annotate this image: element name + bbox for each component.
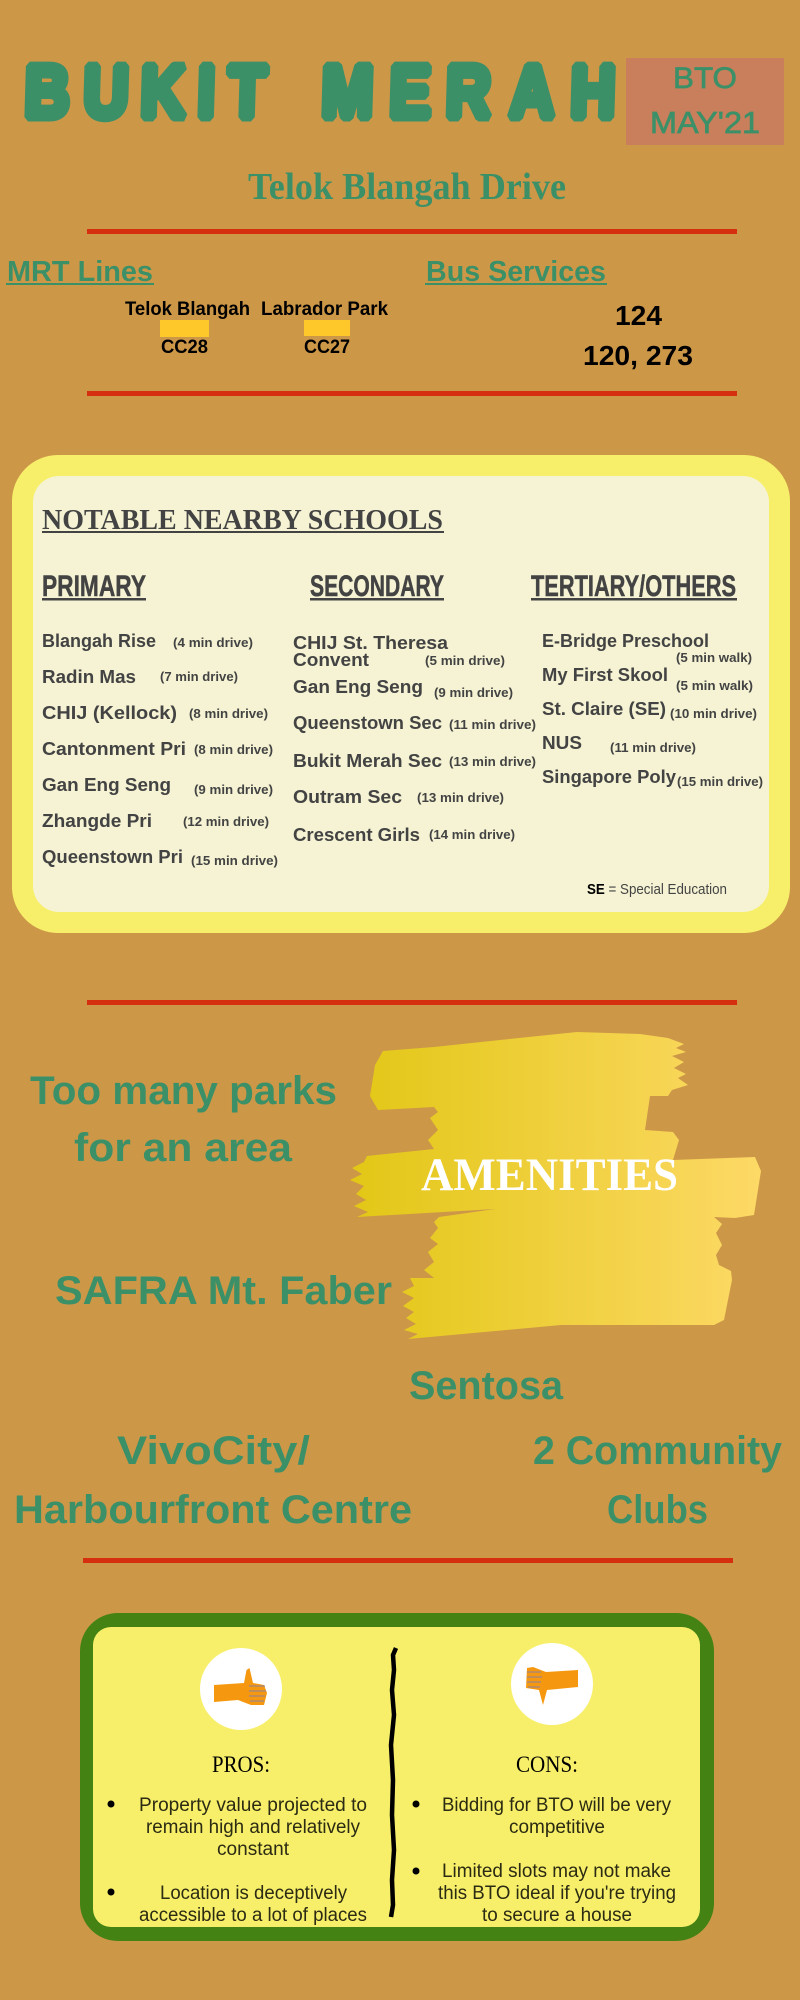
column: tertiary and others: E-Bridge Preschool: [542, 631, 709, 651]
column: tertiary and others: (11 min drive): [610, 741, 696, 755]
column: secondary schools: Convent: [293, 650, 369, 670]
amenity: too many parks: [30, 1069, 337, 1170]
bullet: bidding: Bidding for BTO will be very: [442, 1795, 671, 1816]
panel: amenities: [14, 1032, 783, 1532]
column: secondary schools: (13 min drive): [417, 791, 504, 805]
heading: notable nearby schools: NOTABLE NEARBY SCHOOLS: [42, 504, 443, 536]
column: secondary schools: [293, 570, 536, 845]
bullet: location: [108, 1883, 367, 1926]
column: tertiary and others: My First Skool: [542, 665, 668, 685]
amenity: SAFRA Mt. Faber: SAFRA Mt. Faber: [55, 1269, 392, 1313]
column: primary schools: Radin Mas: [42, 667, 136, 687]
brush stroke with amenities heading: AMENITIES: [421, 1149, 678, 1201]
column: tertiary and others: (5 min walk): [676, 651, 752, 665]
bus numbers: 124: [615, 300, 662, 331]
column: primary schools: (12 min drive): [183, 815, 269, 829]
panel: notable nearby schools: [12, 455, 790, 933]
panel: bus services: [425, 256, 693, 371]
heading: cons: CONS:: [516, 1752, 578, 1777]
column: secondary schools: (13 min drive): [449, 755, 536, 769]
station: Labrador Park CC27: CC27: [304, 337, 350, 358]
badge: BTO May'21: BTO: [673, 62, 737, 95]
title: Bukit Merah: BUKIT MERAH: [24, 51, 617, 133]
bullet: property value: [108, 1795, 367, 1860]
badge: BTO May'21: MAY'21: [650, 105, 760, 140]
bullet: property value: constant: [217, 1839, 290, 1860]
icon: thumbs down: [511, 1643, 593, 1725]
column: primary schools: Zhangde Pri: [42, 811, 152, 831]
column: primary schools: [42, 570, 278, 868]
badge: BTO May'21: [626, 58, 784, 145]
column: primary schools: Blangah Rise: [42, 631, 156, 651]
divider: hand-drawn vertical line: [391, 1648, 396, 1917]
column: primary schools: (9 min drive): [194, 783, 273, 797]
heading: primary: PRIMARY: [42, 570, 146, 603]
panel: MRT lines: [6, 256, 388, 358]
bullet: location: Location is deceptively: [160, 1883, 347, 1904]
column: primary schools: (8 min drive): [189, 707, 268, 721]
column: tertiary and others: Singapore Poly: [542, 767, 676, 787]
bullet: bidding: competitive: [509, 1817, 605, 1838]
column: primary schools: Gan Eng Seng: [42, 775, 171, 795]
column: tertiary and others: (5 min walk): [676, 679, 753, 693]
heading: MRT Lines: MRT Lines: [7, 256, 153, 288]
column: tertiary and others: [531, 570, 763, 789]
heading: Bus Services: Bus Services: [426, 256, 606, 288]
panel: pros and cons: [80, 1613, 714, 1941]
column: primary schools: (8 min drive): [194, 743, 273, 757]
amenity: Sentosa: Sentosa: [409, 1364, 564, 1408]
column: secondary schools: Crescent Girls: [293, 825, 420, 845]
column: tertiary and others: (15 min drive): [677, 775, 763, 789]
column: secondary schools: (9 min drive): [434, 686, 513, 700]
icon: thumbs up: [200, 1648, 282, 1730]
column: secondary schools: Bukit Merah Sec: [293, 751, 442, 771]
subtitle: street name: Telok Blangah Drive: [248, 166, 566, 208]
amenity: too many parks: for an area: [74, 1126, 293, 1170]
legend: SE = Special Education: SE = Special Education: [587, 881, 727, 898]
amenity: too many parks: Too many parks: [30, 1069, 337, 1113]
column: tertiary and others: NUS: [542, 733, 582, 753]
column: primary schools: (7 min drive): [160, 670, 238, 684]
column: secondary schools: (14 min drive): [429, 828, 515, 842]
column: primary schools: (4 min drive): [173, 636, 253, 650]
bullet: property value: Property value projected to: [139, 1795, 367, 1816]
column: primary schools: CHIJ (Kellock): [42, 703, 177, 723]
column: primary schools: (15 min drive): [191, 854, 278, 868]
amenity: VivoCity / Harbourfront Centre: [14, 1429, 412, 1532]
station: Labrador Park CC27: Labrador Park: [261, 299, 388, 320]
bus numbers: 120, 273: [583, 340, 693, 371]
column: secondary schools: Outram Sec: [293, 787, 402, 807]
bullet: limited slots: this BTO ideal if you're trying: [438, 1883, 676, 1904]
bullet: limited slots: [412, 1861, 676, 1926]
station: Labrador Park CC27: [261, 299, 388, 358]
column: secondary schools: (5 min drive): [425, 654, 505, 668]
column: primary schools: Queenstown Pri: [42, 847, 183, 867]
bus numbers: [583, 300, 693, 371]
amenity: VivoCity / Harbourfront Centre: VivoCity/: [117, 1429, 310, 1473]
column: primary schools: Cantonment Pri: [42, 739, 186, 759]
column: tertiary and others: St. Claire (SE): [542, 699, 666, 719]
bullet: bidding: [412, 1795, 671, 1838]
column: secondary schools: (11 min drive): [449, 718, 536, 732]
amenity: 2 community clubs: 2 Community: [533, 1429, 783, 1473]
column: pros: [108, 1752, 367, 1926]
bullet: location: accessible to a lot of places: [139, 1905, 367, 1926]
station: Telok Blangah CC28: [125, 299, 250, 358]
station: Telok Blangah CC28: Telok Blangah: [125, 299, 250, 320]
bullet: limited slots: to secure a house: [482, 1905, 632, 1926]
brush stroke with amenities heading: [350, 1032, 761, 1339]
amenity: 2 community clubs: [533, 1429, 783, 1532]
column: secondary schools: Queenstown Sec: [293, 713, 442, 733]
bullet: limited slots: Limited slots may not make: [442, 1861, 671, 1882]
station: Telok Blangah CC28: CC28: [161, 337, 208, 358]
heading: pros: PROS:: [212, 1752, 270, 1777]
column: cons: [412, 1752, 676, 1926]
bullet: property value: remain high and relatively: [146, 1817, 360, 1838]
amenity: 2 community clubs: Clubs: [607, 1488, 708, 1532]
column: secondary schools: CHIJ St. Theresa: [293, 633, 449, 653]
heading: secondary: SECONDARY: [310, 570, 444, 603]
column: secondary schools: Gan Eng Seng: [293, 677, 423, 697]
amenity: VivoCity / Harbourfront Centre: Harbourfront Centre: [14, 1488, 412, 1532]
column: tertiary and others: (10 min drive): [670, 707, 757, 721]
